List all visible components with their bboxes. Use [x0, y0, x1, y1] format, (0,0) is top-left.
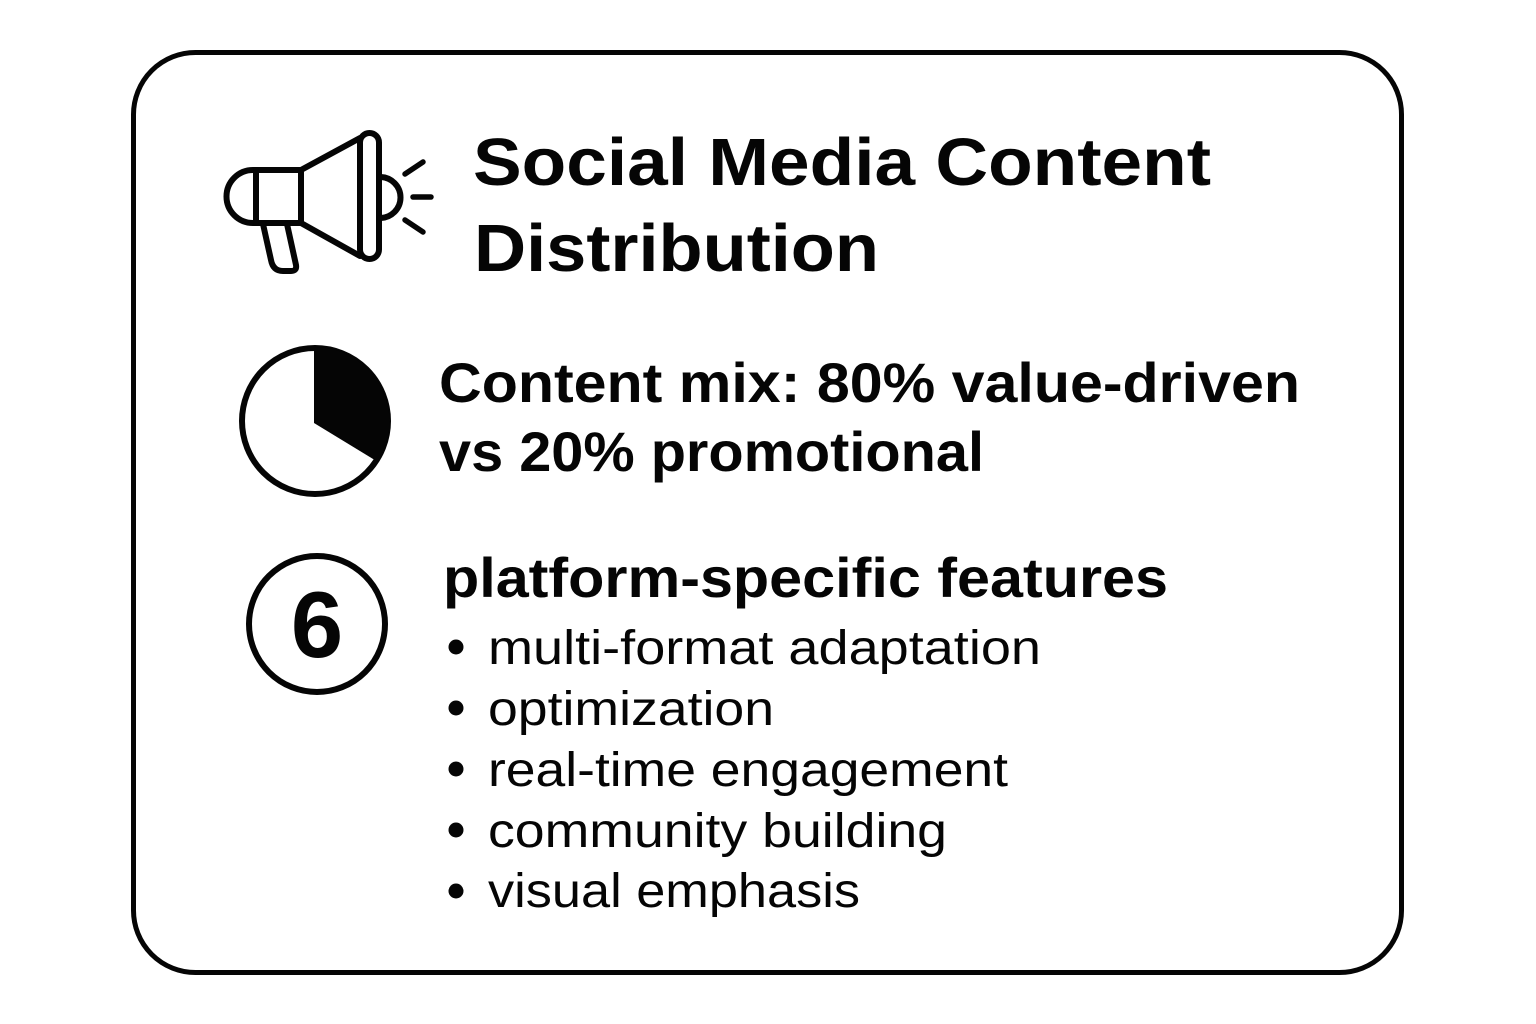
- heading: platform features: platform-specific features: [443, 546, 1168, 609]
- text: content mix: [439, 351, 1300, 483]
- bullet: multi-format adaptation: multi-format adaptation: [488, 622, 1041, 675]
- bullet: optimization: optimization: [488, 683, 774, 736]
- heading: title: Distribution: [474, 211, 879, 286]
- list: feature bullets: [448, 622, 1041, 918]
- icon: megaphone: [226, 133, 431, 271]
- bullet: real-time engagement: real-time engagement: [488, 744, 1008, 797]
- text: content mix: Content mix: 80% value-driven: [439, 351, 1300, 414]
- panel: card outline: [134, 52, 1402, 972]
- bullet: visual emphasis: visual emphasis: [488, 865, 860, 918]
- heading: title: Social Media Content: [473, 125, 1211, 200]
- heading: title: [473, 125, 1211, 286]
- icon: pie chart: [242, 347, 390, 494]
- icon: number six badge: [249, 556, 385, 692]
- bullet: community building: community building: [488, 805, 947, 858]
- text: content mix: vs 20% promotional: [439, 420, 984, 483]
- icon: number six badge: 6: [291, 572, 343, 677]
